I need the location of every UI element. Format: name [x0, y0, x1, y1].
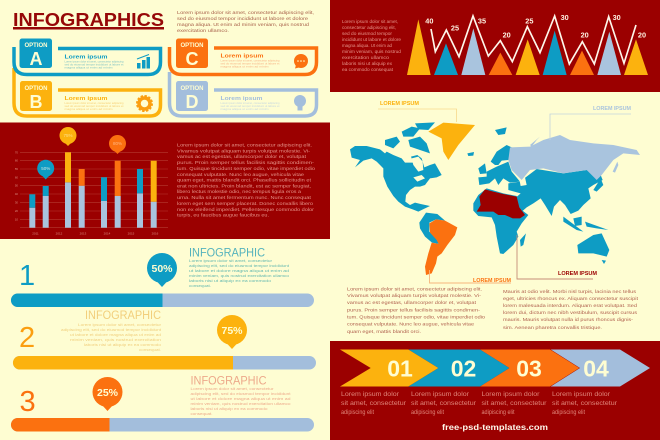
option A card: OPTION	[24, 43, 48, 49]
map shapes	[350, 122, 640, 275]
arrow step 04	[551, 350, 650, 386]
map text: right column	[503, 289, 639, 331]
triangle text: magna aliqua. Ut enim ad	[342, 43, 392, 48]
bar chart: 2013	[80, 232, 87, 236]
step captions: adipiscing elit	[411, 409, 444, 416]
option D card: Lorem ipsum dolor sit amet, consectetur adipiscing	[220, 102, 280, 105]
option A card	[14, 38, 160, 74]
map text: left column: vamus ac est egestas, ullamcorper dolor et, volutpat	[347, 300, 477, 306]
pin: blue 50%	[37, 160, 54, 180]
bar chart: 50	[15, 184, 18, 188]
chart text block: consequat vulputate. Nunc leo augue, vehicula vitae	[177, 172, 304, 177]
bar chart: 60	[15, 175, 18, 179]
map text: right column: lorem dui, dictum nec nibh vestibulum, suscipit cursus	[503, 310, 638, 316]
progress row 1: 50%	[151, 263, 173, 275]
step captions: sit amet, consectetur	[411, 400, 476, 407]
step captions: sit amet, consectetur	[341, 400, 406, 407]
progress row 2: 75%	[221, 325, 243, 337]
chart text block: lorem eget sem semper placerat. Donec convallis libero	[177, 201, 313, 206]
progress row 1	[11, 248, 314, 307]
step captions: Lorem ipsum dolor	[411, 391, 469, 398]
option B card: Lorem ipsum dolor sit amet, consectetur adipiscing	[64, 102, 124, 105]
option C card: Lorem ipsum dolor sit amet, consectetur adipiscing	[220, 60, 280, 62]
arrow step 04: 04	[583, 356, 609, 382]
map text: left column: consequat vulputate. Nunc leo augue, vehicula vitae	[347, 322, 474, 328]
map text: left column: Lorem ipsum dolor sit amet, consectetur adipiscing elit.	[347, 286, 482, 292]
map text: left column: Vivamus volutpat aliquam turpis volutpat molestie. Vi-	[347, 293, 481, 299]
option C card: sed do eiusmod tempor incididunt ut labore et	[220, 62, 280, 66]
progress row 3: 3	[20, 386, 36, 418]
title: INFOGRAPHICS	[13, 9, 164, 30]
progress row 3: consequat.	[190, 412, 213, 416]
option B card: OPTION	[24, 86, 48, 92]
progress row 3: 25%	[97, 387, 119, 399]
callout: orange bottom: LOREM IPSUM	[473, 278, 511, 284]
progress row 3: INFOGRAPHIC	[190, 376, 266, 388]
triangle text: Lorem ipsum dolor sit amet,	[342, 19, 398, 24]
progress row 1: minim veniam, quis nostrud exercitation ullamco	[189, 274, 289, 278]
bar chart	[15, 150, 168, 236]
icon: light bulb	[294, 95, 306, 110]
footer url: free-psd-templates.com	[442, 422, 548, 432]
pin: yellow 75%	[60, 127, 76, 146]
map text: right column: sim. Aenean pharetra convallis tristique.	[503, 325, 602, 331]
option C card: Lorem ipsum	[220, 54, 264, 60]
triangle text	[342, 19, 401, 72]
progress row 3: minim veniam, quis nostrud exercitation ullamco	[190, 402, 291, 406]
progress row 2: ut labore et dolore magna aliqua ut enim ad	[70, 333, 161, 337]
step captions: Lorem ipsum dolor	[341, 391, 399, 398]
chart text block: tum. Quisque tincidunt semper odio, vitae imperdiet odio	[177, 166, 315, 171]
progress row 1: adipiscing elit, sed do eiusmod tempor incididunt	[189, 264, 289, 268]
triangle chart: 30	[561, 13, 569, 22]
callout: lavender top: LOREM IPSUM	[593, 106, 631, 112]
chart text block	[177, 142, 315, 218]
panel: progress bars	[11, 248, 316, 432]
bar chart: 2016	[152, 232, 159, 236]
option C card	[170, 38, 316, 74]
bar chart: 40	[15, 192, 18, 196]
triangle chart: 30	[613, 13, 621, 22]
step captions: Lorem ipsum dolor	[552, 391, 610, 398]
progress row 1: laboris nisi ut aliquip ex ea commodo	[189, 279, 271, 283]
option D card: sed do eiusmod tempor incididunt ut labore et	[220, 105, 280, 108]
progress row 2: 2	[19, 322, 35, 354]
option B card: magna aliqua ut enim ad minim	[64, 108, 112, 111]
callout: lavender top	[550, 106, 631, 140]
callout: orange top: LOREM IPSUM	[380, 101, 419, 107]
progress row 3: ut labore et dolore magna aliqua ut enim ad	[190, 397, 291, 401]
progress row 1: Lorem ipsum dolor sit amet, consectetur	[189, 259, 273, 263]
triangle chart: 20	[581, 30, 589, 39]
intro text: sed do eiusmod tempor incididunt ut labore et dolore	[177, 16, 308, 21]
progress row 3: adipiscing elit, sed do eiusmod tempor incididunt	[190, 392, 291, 396]
option A card: Lorem ipsum	[64, 54, 108, 60]
map text: left column	[347, 286, 485, 335]
chart text block: Vivamus volutpat aliquam turpis volutpat molestie. Vi-	[177, 148, 311, 153]
option B card: B	[30, 92, 42, 112]
progress row 2: laboris nisi ut aliquip ex ea commodo	[84, 343, 161, 347]
progress row 2: INFOGRAPHIC	[85, 310, 161, 322]
pin: yellow 75%: 75%	[63, 133, 73, 138]
icon: gear	[137, 96, 152, 111]
progress row 2: minim veniam, quis nostrud exercitation	[70, 338, 161, 342]
option C card: C	[186, 49, 198, 69]
triangle text: minim veniam, quis nostrud	[342, 49, 401, 54]
triangle text: incididunt ut labore et dolore	[342, 37, 401, 42]
step captions: Lorem ipsum dolor	[482, 391, 540, 398]
triangle chart: 20	[638, 30, 646, 39]
map text: left column: quam eget, mattis blandit orci.	[347, 329, 421, 335]
callout: red bottom	[517, 235, 597, 279]
icon: speech bubble	[294, 54, 308, 68]
progress row 2: adipiscing elit, sed do eiusmod tempor incididunt	[61, 328, 161, 332]
step captions: adipiscing elit	[341, 409, 374, 416]
progress row 3: laboris nisi ut aliquip ex ea commodo	[190, 407, 268, 411]
chart text block: erat non ultricies. Proin blandit, est ac semper feugiat,	[177, 183, 311, 188]
icon: bar chart	[137, 54, 150, 68]
chart text block: purus. Proin semper tellus facilisis sagittis condimen-	[177, 160, 315, 165]
pin: orange 80%	[109, 135, 126, 154]
bar chart: 2011	[32, 232, 39, 236]
triangle chart: 35	[478, 17, 486, 26]
bar chart: 10	[15, 217, 18, 221]
bar chart: 30	[15, 201, 18, 205]
chart text block: vamus ac est egestas, ullamcorper dolor et, volutpat	[177, 154, 307, 159]
chart text block: non ex eleifend imperdiet. Pellentesque commodo dolor	[177, 207, 315, 212]
intro text	[177, 10, 314, 33]
bar chart: 60	[15, 159, 18, 163]
bar chart: 20	[15, 209, 18, 213]
option D card: D	[186, 92, 198, 112]
pin: blue 50%: 50%	[41, 166, 50, 171]
step captions	[341, 391, 617, 416]
bar chart: 2015	[128, 232, 135, 236]
triangle text: ea commodo consequat	[342, 67, 394, 72]
panel: bar chart section	[0, 122, 330, 239]
step captions: sit amet, consectetur	[482, 400, 546, 407]
intro text: magna aliqua. Ut enim ad minim veniam, quis nostrud	[177, 22, 309, 27]
panel: step arrows	[330, 341, 660, 440]
map text: left column: purus. Proin semper tellus facilisis sagittis condimen-	[347, 308, 480, 314]
option B card: Lorem ipsum	[64, 96, 108, 102]
panel: world map	[347, 101, 640, 335]
bar chart: 70	[15, 150, 18, 154]
triangle chart: 25	[451, 24, 459, 33]
arrow step 02	[408, 350, 509, 386]
option A card: A	[30, 49, 42, 69]
triangle chart: 25	[525, 17, 533, 26]
map text: right column: Mauris at odio velit. Morbi nisl turpis, lacinia nec tellus	[503, 289, 637, 295]
progress row 3: Lorem ipsum dolor sit amet, consectetur	[190, 387, 275, 391]
triangle text: laboris nisi ut aliquip ex	[342, 61, 393, 66]
map text: right column: mauris. Mauris volutpat nulla id purus rhoncus dignis-	[503, 317, 633, 323]
option A card: Lorem ipsum dolor sit amet, consectetur adipiscing	[64, 60, 124, 64]
arrow step 01	[340, 350, 438, 386]
map text: right column: eget, ultricies rhoncus ex. Aliquam consectetur suscipit	[503, 296, 639, 302]
option D card: OPTION	[180, 86, 204, 92]
callout: red bottom: LOREM IPSUM	[558, 271, 597, 277]
callout: orange top	[378, 101, 456, 122]
triangle chart: 20	[503, 31, 511, 40]
step captions: sit amet, consectetur	[552, 400, 617, 407]
triangle text: sed do eiusmod tempor	[342, 31, 392, 36]
map text: right column: lorem malesuada interdum. Aliquam erat volutpat. Sed	[503, 303, 637, 309]
progress row 1: INFOGRAPHIC	[189, 248, 265, 260]
progress row 2: Lorem ipsum dolor sit amet, consectetur	[78, 323, 162, 327]
callout: orange bottom	[430, 270, 511, 284]
intro text: exercitation ullamco.	[177, 28, 229, 33]
chart text block: turpis, eu faucibus augue faucibus eu.	[177, 212, 269, 218]
pin: orange 80%: 80%	[113, 141, 122, 146]
bar chart: 2012	[56, 232, 63, 236]
bar chart: 2014	[104, 232, 111, 236]
option C card: OPTION	[180, 43, 204, 49]
triangle text: exercitation ullamco	[342, 55, 390, 60]
triangle chart	[407, 13, 648, 75]
chart text block: quam eget, mattis blandit orci. Phasellus sollicitudin et	[177, 178, 312, 182]
bar chart: 55	[15, 167, 18, 171]
arrow step 03	[480, 350, 579, 386]
option D card: magna aliqua ut enim ad minim	[220, 108, 268, 111]
progress row 2	[13, 310, 316, 370]
option A card: sed do eiusmod tempor incididunt ut labore et	[64, 64, 124, 66]
option B card: sed do eiusmod tempor incididunt ut labore et	[64, 105, 124, 108]
chart text block: Lorem ipsum dolor sit amet, consectetur adipiscing elit.	[177, 142, 312, 148]
progress row 3	[11, 376, 314, 432]
intro text: Lorem ipsum dolor sit amet, consectetur adipiscing elit,	[177, 10, 314, 15]
chart text block: libero lectus molestie odio, nec tempus ligula eros a	[177, 189, 301, 194]
option A card: magna aliqua ut enim ad minim	[64, 66, 112, 70]
arrow step 03: 03	[516, 356, 542, 382]
panel: triangle chart	[330, 0, 660, 92]
map text: left column: tum. Quisque tincidunt semper odio, vitae imperdiet odio	[347, 314, 485, 320]
step captions: adipiscing elit	[482, 409, 515, 416]
panel: options	[13, 9, 316, 116]
option B card	[14, 68, 160, 116]
triangle chart: 40	[425, 16, 433, 25]
progress row 1: ut labore et dolore magna aliqua ut enim ad	[189, 269, 289, 273]
chart text block: urna. Nulla sit amet fermentum nunc. Nunc consequat	[177, 195, 312, 200]
step captions: adipiscing elit	[552, 409, 585, 416]
arrow step 02: 02	[451, 356, 476, 382]
option C card: magna aliqua ut enim ad minim	[220, 66, 268, 68]
progress row 1: consequat.	[189, 284, 211, 288]
progress row 2: consequat.	[139, 348, 161, 352]
progress row 1: 1	[19, 260, 35, 292]
option D card	[170, 72, 316, 116]
arrow step 01: 01	[387, 356, 413, 382]
option D card: Lorem ipsum	[220, 96, 262, 102]
triangle text: consectetur adipiscing elit,	[342, 25, 396, 30]
